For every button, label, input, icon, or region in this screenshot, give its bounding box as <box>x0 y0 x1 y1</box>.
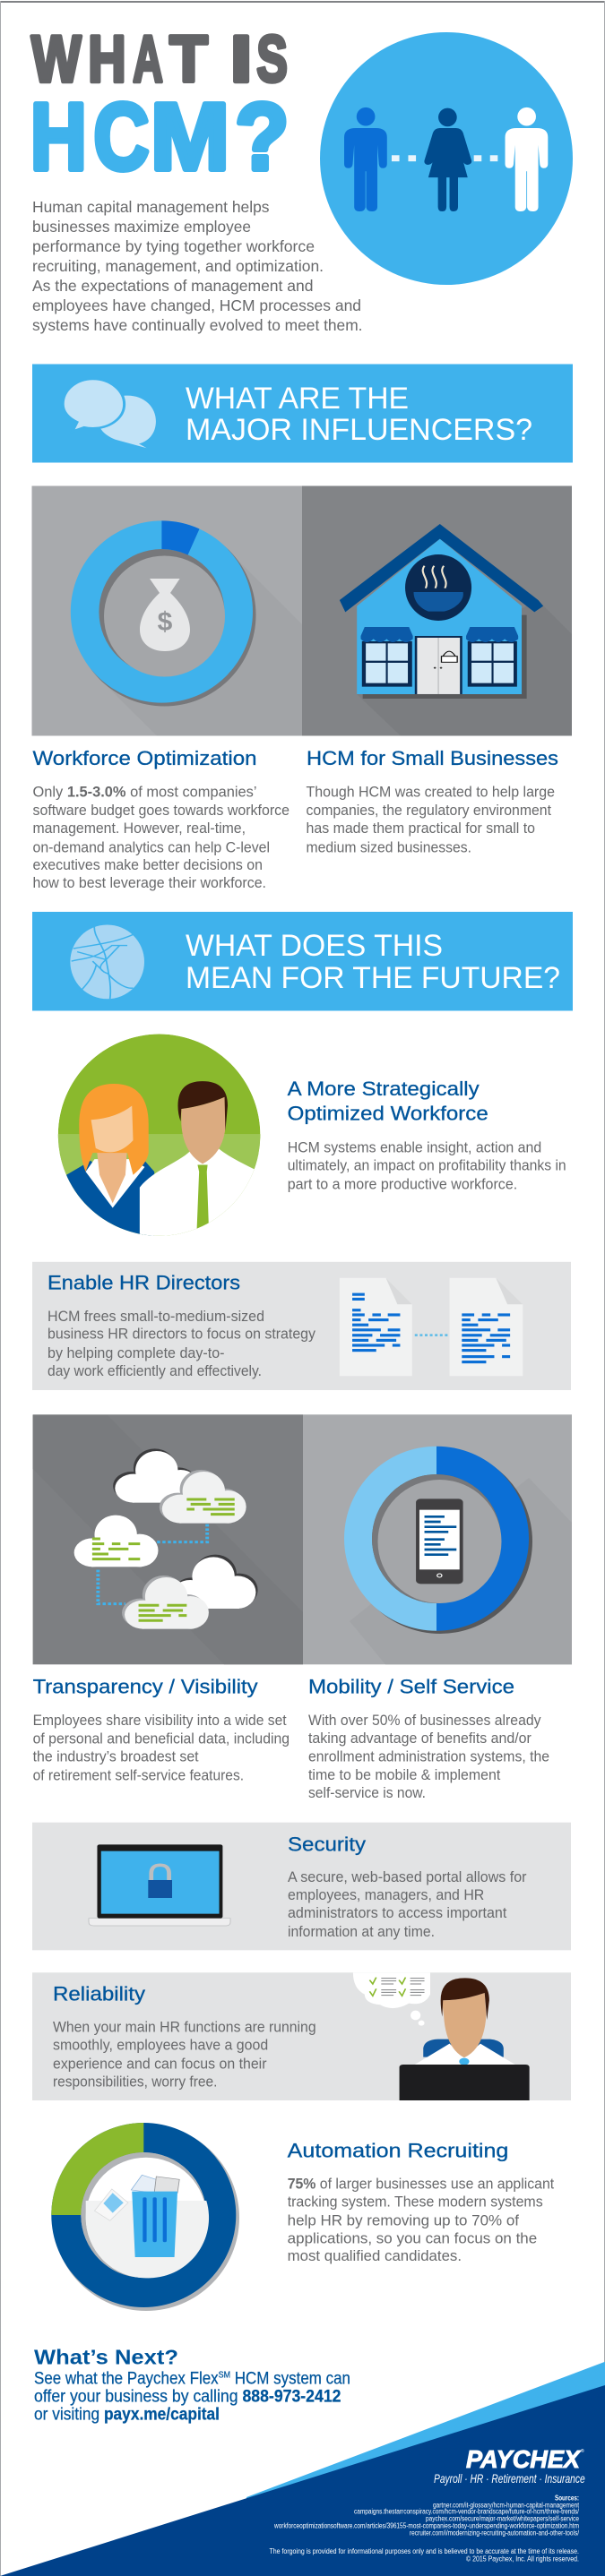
cloud middle data <box>74 1516 159 1567</box>
panel: security <box>32 1823 571 1950</box>
sign with coffee cup <box>405 554 471 621</box>
intro text: businesses maximize employee <box>32 218 251 236</box>
intro text: employees have changed, HCM processes and <box>32 296 361 314</box>
section: workforce optimization: management. However, real-time, <box>32 820 246 837</box>
sources: Sources: <box>555 2494 579 2503</box>
section: hcm for small businesses: medium sized businesses. <box>307 839 471 855</box>
title: C <box>93 84 149 190</box>
section: a more strategically optimized workforce <box>288 1078 566 1192</box>
title: I <box>230 23 252 96</box>
icon: money bag: $ <box>158 607 173 637</box>
title <box>30 23 289 190</box>
icon: paper on floor <box>94 2175 179 2257</box>
section: automation recruiting: tracking system. These modern systems <box>288 2194 543 2210</box>
section: automation recruiting: 75% of larger businesses use an applicant <box>288 2176 555 2192</box>
icon: money bag <box>140 579 190 651</box>
section: mobility / self service: Mobility / Self Service <box>308 1676 514 1698</box>
section: workforce optimization: executives make better decisions on <box>32 857 263 873</box>
section: a more strategically optimized workforce: Optimized Workforce <box>288 1103 488 1125</box>
call to action: what's next <box>34 2345 350 2424</box>
section: transparency / visibility: Transparency / Visibility <box>33 1676 258 1698</box>
title: W <box>31 23 82 96</box>
section: a more strategically optimized workforce: A More Strategically <box>288 1078 480 1100</box>
body text: smoothly, employees have a good <box>53 2037 268 2053</box>
person <box>415 1978 515 2065</box>
body text: information at any time. <box>288 1924 435 1940</box>
section: automation recruiting: applications, so you can focus on the <box>288 2230 537 2246</box>
section: hcm for small businesses <box>307 747 558 855</box>
banner heading: MAJOR INFLUENCERS? <box>186 413 532 447</box>
banner heading: MEAN FOR THE FUTURE? <box>186 961 560 995</box>
body text: experience and can focus on their <box>53 2056 267 2072</box>
heading: Enable HR Directors <box>48 1272 240 1294</box>
intro text: systems have continually evolved to meet them. <box>32 316 363 334</box>
section: workforce optimization: Only 1.5-3.0% of most companies’ <box>32 784 256 800</box>
section: transparency / visibility: Employees share visibility into a wide set <box>33 1713 287 1729</box>
section: hcm for small businesses: has made them practical for small to <box>307 820 535 837</box>
roof <box>340 524 543 612</box>
icon: speech bubbles <box>63 379 156 448</box>
monitor <box>400 2065 530 2100</box>
panel: enable hr directors <box>32 1262 571 1390</box>
panel: mobile donut <box>303 1414 572 1664</box>
body text: HCM frees small-to-medium-sized <box>48 1309 264 1325</box>
cloud bottom white <box>172 1555 258 1609</box>
icon: globe <box>70 924 144 999</box>
banner: major influencers <box>32 364 573 462</box>
heading: Security <box>288 1833 366 1856</box>
house wall <box>357 539 522 694</box>
door <box>415 636 462 694</box>
section: mobility / self service <box>308 1676 549 1801</box>
body text <box>288 1869 527 1940</box>
intro text <box>32 198 363 334</box>
disclaimer: © 2015 Paychex, Inc. All rights reserved. <box>466 2555 579 2563</box>
house shadow <box>363 615 527 699</box>
heading: Reliability <box>53 1982 145 2005</box>
icon: laptop with lock <box>89 1844 230 1926</box>
body text: A secure, web-based portal allows for <box>288 1869 527 1885</box>
section: workforce optimization: how to best leverage their workforce. <box>32 875 266 891</box>
icon: woman <box>424 108 471 211</box>
man <box>140 1081 256 1238</box>
cloud top data <box>160 1470 246 1524</box>
panel: cloud illustration <box>33 1414 303 1664</box>
illustration: two employees in green circle <box>58 1035 261 1238</box>
title: T <box>169 23 208 96</box>
body text: When your main HR functions are running <box>53 2019 316 2035</box>
woman <box>66 1084 154 1238</box>
section: transparency / visibility: the industry’s broadest set <box>33 1749 199 1765</box>
title: M <box>151 84 229 190</box>
body text: business HR directors to focus on strategy <box>48 1327 316 1343</box>
right window <box>466 627 518 687</box>
title: S <box>256 23 288 96</box>
section: hcm for small businesses: HCM for Small Businesses <box>307 747 558 769</box>
body text: administrators to access important <box>288 1905 507 1921</box>
section: workforce optimization: Workforce Optimization <box>32 747 256 769</box>
panel: reliability <box>32 1972 571 2100</box>
icon: people in circle <box>320 32 573 285</box>
intro text: Human capital management helps <box>32 198 270 216</box>
disclaimer <box>269 2547 579 2563</box>
section: transparency / visibility <box>33 1676 290 1784</box>
icon: phone <box>416 1498 463 1584</box>
left window <box>361 627 413 687</box>
section: mobility / self service: time to be mobile & implement <box>308 1767 501 1783</box>
section: hcm for small businesses: companies, the regulatory environment <box>307 803 551 819</box>
section: workforce optimization: on-demand analytics can help C-level <box>32 839 270 855</box>
call to action: what's next: offer your business by calling 888-973-2412 <box>34 2387 341 2406</box>
section: automation recruiting: help HR by removing up to 70% of <box>288 2212 519 2228</box>
donut: automation recruiting with bin <box>51 2123 239 2311</box>
section: automation recruiting: most qualified candidates. <box>288 2248 462 2264</box>
section: mobility / self service: taking advantage of benefits and/or <box>308 1730 532 1747</box>
cloud bottom data <box>122 1576 209 1629</box>
call to action: what's next: or visiting payx.me/capital <box>34 2405 220 2424</box>
icon: documents <box>340 1278 523 1376</box>
icon: man <box>344 107 387 211</box>
cloud top white <box>113 1448 199 1503</box>
title: H <box>88 23 126 96</box>
icon: papers in bin <box>131 2175 179 2193</box>
sources <box>273 2494 580 2537</box>
body text: employees, managers, and HR <box>288 1887 484 1903</box>
section: workforce optimization <box>32 747 290 891</box>
section: transparency / visibility: of personal and beneficial data, including <box>33 1731 290 1747</box>
intro text: performance by tying together workforce <box>32 237 315 255</box>
section: workforce optimization: software budget goes towards workforce <box>32 803 290 819</box>
thought bubble <box>353 1972 430 2026</box>
section: automation recruiting: Automation Recruiting <box>288 2139 508 2161</box>
footer band <box>0 2362 605 2576</box>
logo: paychex: PAYCHEX <box>466 2445 582 2473</box>
section: mobility / self service: With over 50% of businesses already <box>308 1713 541 1729</box>
call to action: what's next: SM <box>219 2370 230 2380</box>
logo: paychex: ® <box>581 2448 584 2454</box>
banner heading: WHAT ARE THE <box>186 382 409 416</box>
icon: white figure <box>506 107 548 211</box>
section: a more strategically optimized workforce: part to a more productive workforce. <box>288 1176 517 1192</box>
title: ? <box>235 84 289 190</box>
banner: future <box>32 912 573 1010</box>
illustration: employee at computer <box>353 1972 530 2100</box>
connector dots <box>392 155 497 161</box>
title: A <box>133 23 163 96</box>
banner heading <box>186 929 560 995</box>
body text: responsibilities, worry free. <box>53 2074 217 2090</box>
title: H <box>30 84 87 190</box>
call to action: what's next: See what the Paychex Flex <box>34 2369 240 2388</box>
section: mobility / self service: self-service is now. <box>308 1785 426 1801</box>
section: automation recruiting <box>288 2139 555 2264</box>
intro text: As the expectations of management and <box>32 277 314 295</box>
banner heading <box>186 382 532 447</box>
panel: workforce optimization donut <box>32 485 302 736</box>
intro text: recruiting, management, and optimization. <box>32 257 324 275</box>
section: transparency / visibility: of retirement self-service features. <box>33 1768 244 1784</box>
body text <box>48 1309 316 1379</box>
connector lines <box>98 1524 207 1604</box>
icon: recycling bin <box>132 2192 177 2257</box>
body text: by helping complete day-to- <box>48 1345 224 1361</box>
call to action: what's next: HCM system can <box>230 2369 350 2388</box>
section: a more strategically optimized workforce: ultimately, an impact on profitability thanks in <box>288 1157 566 1173</box>
call to action: what's next: What’s Next? <box>34 2345 178 2368</box>
body text: day work efficiently and effectively. <box>48 1363 262 1379</box>
panel: small business house <box>302 485 572 736</box>
section: a more strategically optimized workforce: HCM systems enable insight, action and <box>288 1139 541 1155</box>
section: hcm for small businesses: Though HCM was created to help large <box>307 784 555 800</box>
body text <box>53 2019 316 2090</box>
banner heading: WHAT DOES THIS <box>186 929 443 963</box>
section: mobility / self service: enrollment administration systems, the <box>308 1749 549 1765</box>
